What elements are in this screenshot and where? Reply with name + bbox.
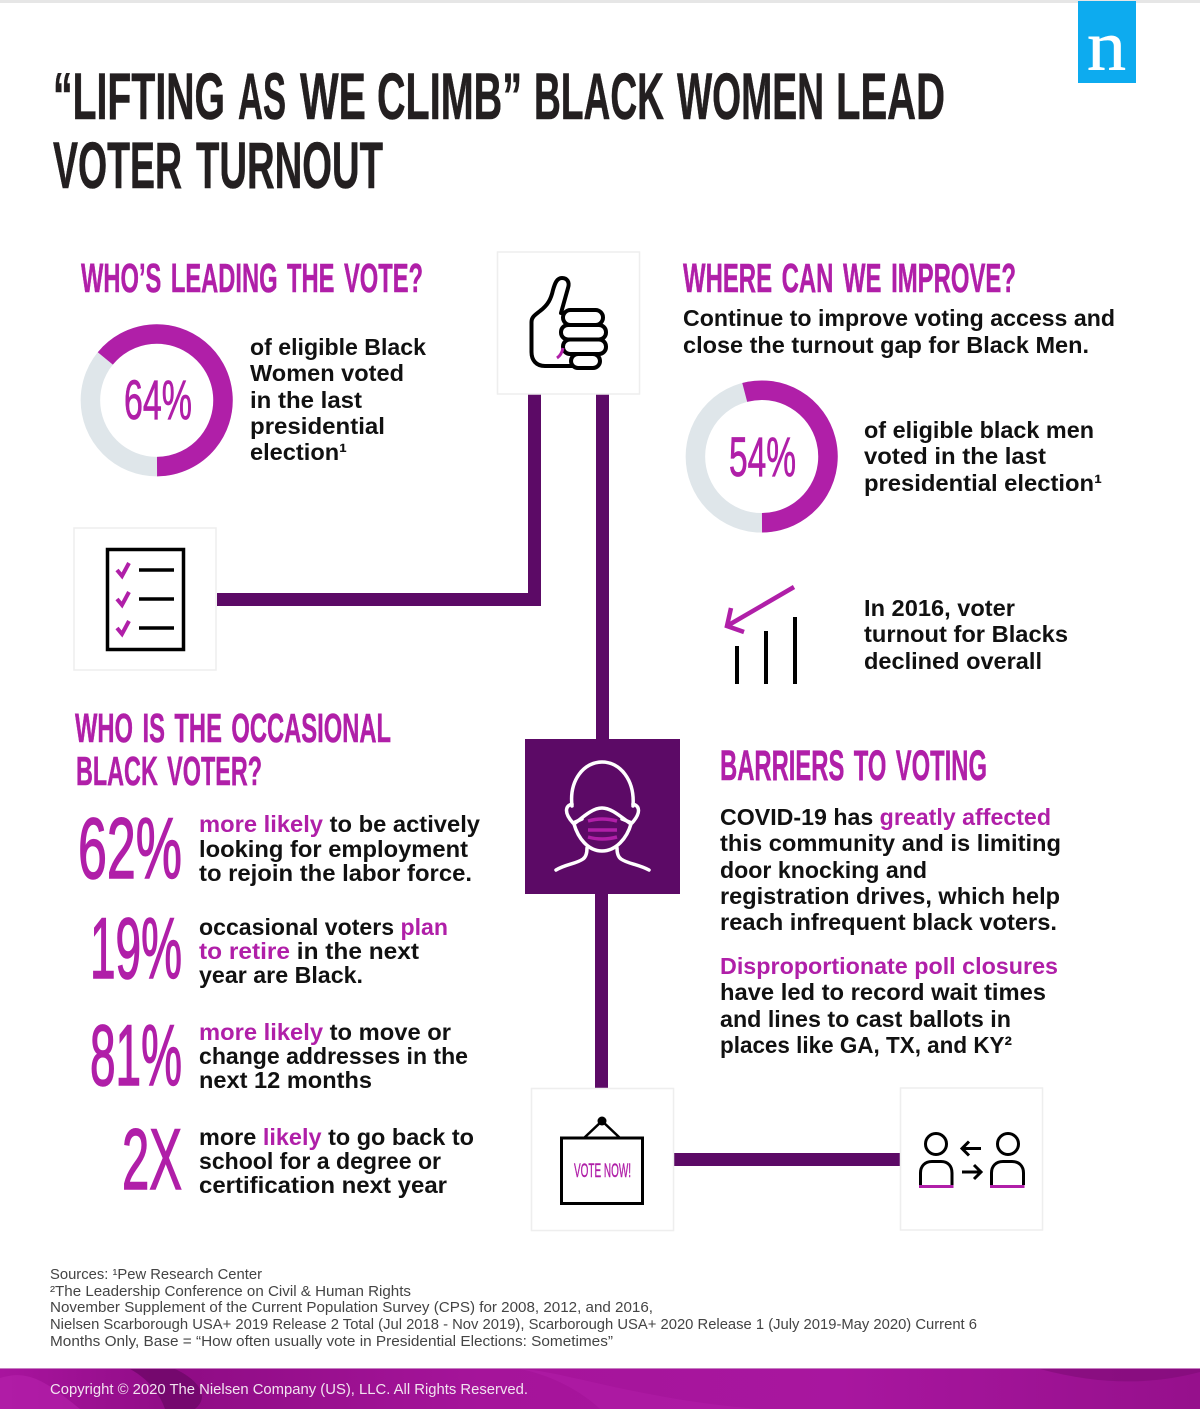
text: 2016 turnout: declined overall — [864, 648, 1042, 674]
text: 2016 turnout: In 2016, voter — [864, 595, 1015, 621]
icon: face mask — [525, 739, 680, 894]
text: covid: reach infrequent black voters. — [720, 909, 1057, 935]
donut: 64% — [63, 307, 250, 494]
connector lines — [217, 394, 900, 1166]
text: black women: election¹ — [250, 439, 347, 465]
title: WE — [300, 59, 366, 133]
panel: who's leading the vote — [63, 255, 426, 494]
text: poll closures: places like GA, TX, and KY² — [720, 1032, 1012, 1058]
text: black women — [250, 334, 426, 465]
panel: where can we improve — [681, 255, 1115, 684]
stat: 62%: to rejoin the labor force. — [199, 860, 472, 886]
stat: 62% — [78, 801, 480, 897]
text: black men: presidential election¹ — [864, 470, 1102, 496]
text: black men: voted in the last — [864, 443, 1046, 469]
icon: people exchanging — [900, 1088, 1042, 1230]
heading: who's leading: WHO’S LEADING THE VOTE? — [81, 255, 423, 301]
heading: occasional voter: BLACK VOTER? — [76, 748, 262, 794]
text: poll closures — [720, 953, 1058, 1058]
title: VOTER — [53, 128, 182, 202]
icon: vote now sign: VOTE NOW! — [574, 1161, 631, 1182]
text: black women: in the last — [250, 387, 362, 413]
title: WOMEN — [677, 59, 824, 133]
text: poll closures: Disproportionate poll closures — [720, 953, 1058, 979]
title: AS — [238, 59, 286, 133]
panel: barriers to voting — [720, 742, 1061, 1058]
title: CLIMB” — [377, 59, 522, 133]
text: covid: registration drives, which help — [720, 883, 1060, 909]
stat: 62%: more likely to be actively — [199, 811, 480, 837]
text: black men: of eligible black men — [864, 417, 1094, 443]
sources — [50, 1267, 977, 1350]
text: 2016 turnout — [864, 595, 1068, 674]
sources: Nielsen Scarborough USA+ 2019 Release 2 Total (Jul 2018 - Nov 2019), Scarborough USA+ 2020 Release 1 (July 2019-May 2020) Current 6 — [50, 1317, 977, 1333]
stat: 2X — [122, 1112, 474, 1208]
stat: 2X: certification next year — [199, 1172, 447, 1198]
stat: 19%: occasional voters plan — [199, 914, 448, 940]
title: LEAD — [836, 59, 945, 133]
stat: 81%: more likely to move or — [199, 1019, 451, 1045]
text: poll closures: have led to record wait times — [720, 979, 1046, 1005]
title: TURNOUT — [196, 128, 383, 202]
stat: 19% — [90, 901, 448, 997]
donut: 54%: 54% — [729, 425, 796, 488]
text: black men — [864, 417, 1102, 496]
icon: vote now sign — [532, 1088, 674, 1230]
title — [53, 59, 945, 202]
stat: 2X: more likely to go back to — [199, 1124, 474, 1150]
logo: n — [1087, 6, 1126, 86]
panel: occasional black voter — [75, 705, 480, 1208]
subheading text: Continue to improve voting access and — [683, 305, 1115, 331]
stat: 19%: 19% — [90, 901, 182, 997]
donut: 64%: 64% — [124, 368, 192, 431]
icon: thumbs up — [498, 252, 640, 394]
text: poll closures: and lines to cast ballots in — [720, 1006, 1011, 1032]
sources: November Supplement of the Current Population Survey (CPS) for 2008, 2012, and 2016, — [50, 1300, 653, 1316]
stat: 19%: to retire in the next — [199, 938, 419, 964]
donut: 54% — [681, 376, 842, 537]
text: 2016 turnout: turnout for Blacks — [864, 621, 1068, 647]
stat: 62%: looking for employment — [199, 836, 468, 862]
text: covid: door knocking and — [720, 857, 927, 883]
heading: occasional voter — [75, 705, 391, 794]
title: “LIFTING — [53, 59, 225, 133]
stat: 81%: 81% — [90, 1008, 182, 1104]
text: black women: of eligible Black — [250, 334, 426, 360]
copyright: Copyright © 2020 The Nielsen Company (US), LLC. All Rights Reserved. — [50, 1382, 528, 1398]
sources: Sources: ¹Pew Research Center — [50, 1267, 262, 1283]
stat: 2X: 2X — [122, 1112, 182, 1208]
subheading text: close the turnout gap for Black Men. — [683, 332, 1089, 358]
icon: checklist — [74, 528, 216, 670]
sources: Months Only, Base = “How often usually vote in Presidential Elections: Sometimes” — [50, 1334, 613, 1350]
stat: 19%: year are Black. — [199, 962, 363, 988]
heading: occasional voter: WHO IS THE OCCASIONAL — [75, 705, 391, 751]
stat: 62%: 62% — [78, 801, 182, 897]
logo — [1078, 1, 1136, 86]
text: covid: COVID-19 has greatly affected — [720, 804, 1051, 830]
text: covid: this community and is limiting — [720, 830, 1061, 856]
stat: 81%: next 12 months — [199, 1067, 372, 1093]
stat: 2X: school for a degree or — [199, 1148, 441, 1174]
subheading text — [683, 305, 1115, 358]
stat: 81% — [90, 1008, 468, 1104]
icon: declining bars — [727, 587, 795, 684]
title: BLACK — [534, 59, 664, 133]
text: black women: Women voted — [250, 360, 404, 386]
text: black women: presidential — [250, 413, 385, 439]
text: covid — [720, 804, 1061, 935]
footer — [0, 1368, 1200, 1409]
sources: ²The Leadership Conference on Civil & Human Rights — [50, 1284, 411, 1300]
stat: 81%: change addresses in the — [199, 1043, 468, 1069]
heading: barriers: BARRIERS TO VOTING — [720, 742, 987, 790]
